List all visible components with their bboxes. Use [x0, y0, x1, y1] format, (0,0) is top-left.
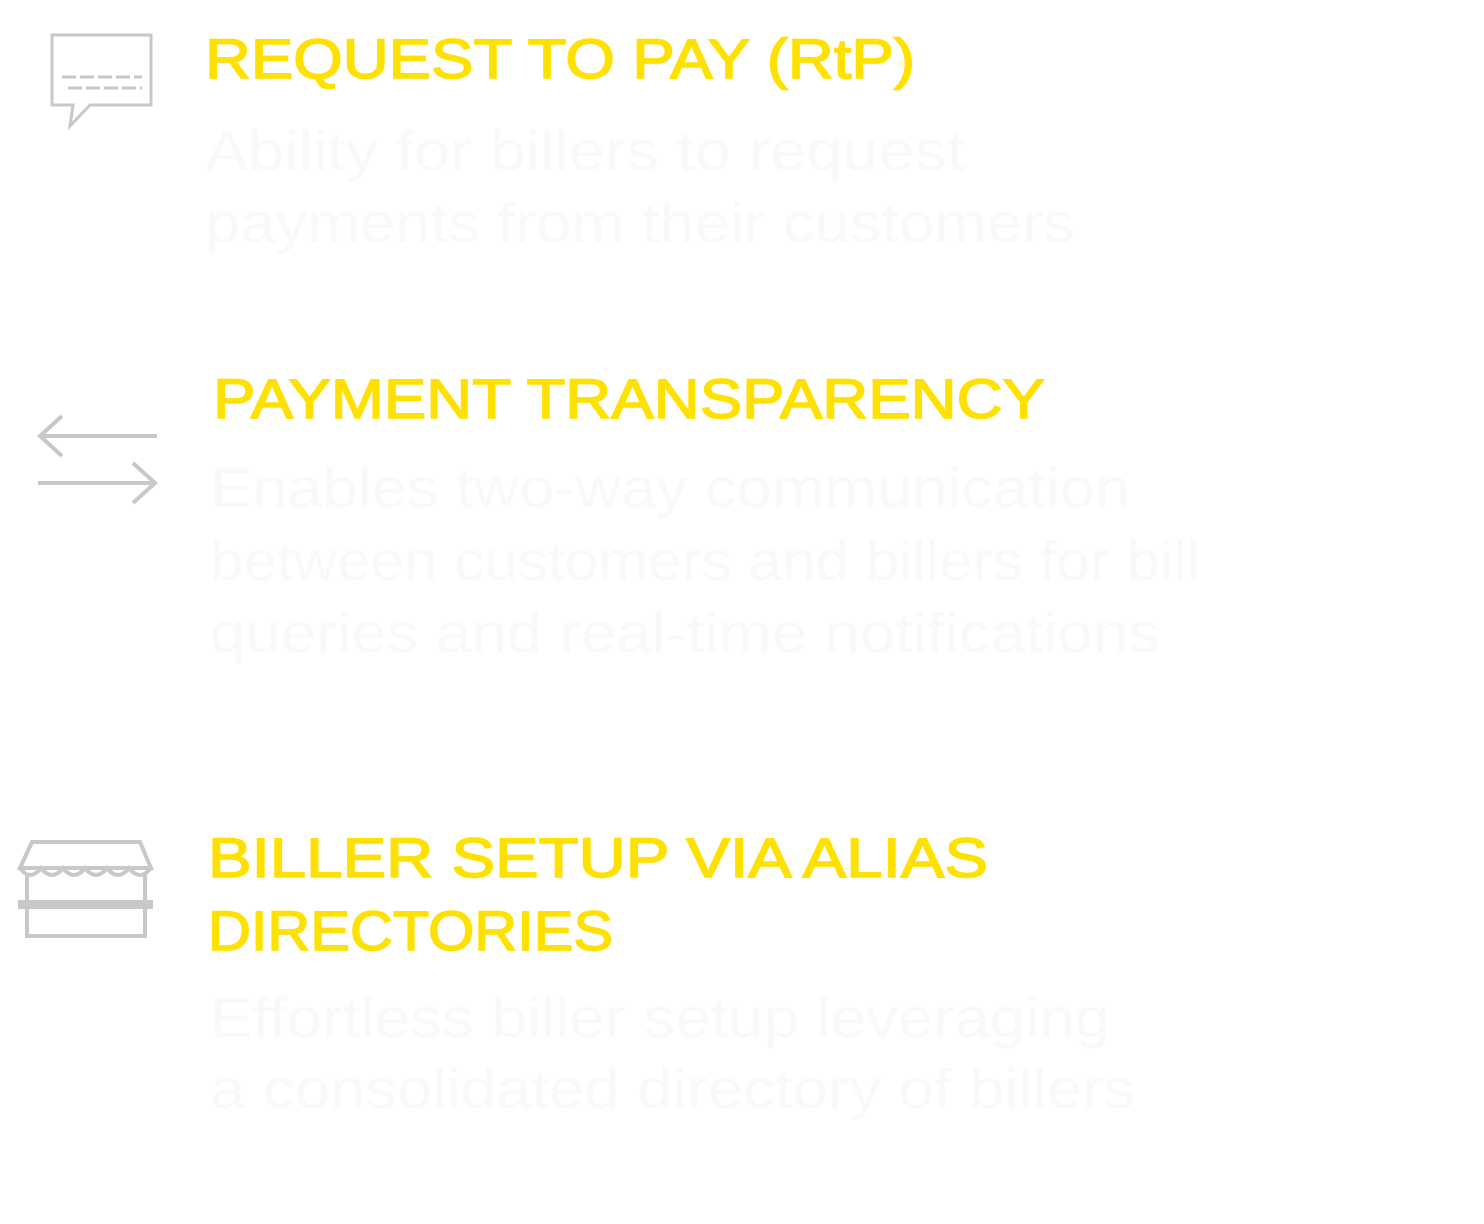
icon: speech bubble [52, 35, 151, 126]
text: transparency description [210, 456, 1200, 664]
title: request to pay: REQUEST TO PAY (RtP) [205, 27, 915, 90]
text: rtp description: payments from their customers [205, 191, 1075, 254]
text: transparency description: queries and real-time notifications [210, 601, 1160, 664]
title: biller setup: DIRECTORIES [208, 899, 613, 962]
icon: two-way arrows [38, 416, 157, 503]
title: biller setup [208, 826, 988, 962]
text: biller setup description: Effortless biller setup leveraging [210, 986, 1110, 1049]
text: rtp description: Ability for billers to request [205, 119, 966, 182]
text: transparency description: between customers and billers for bill [210, 529, 1200, 592]
title: biller setup: BILLER SETUP VIA ALIAS [208, 826, 988, 889]
text: biller setup description: a consolidated directory of billers [210, 1057, 1135, 1120]
text: biller setup description [210, 986, 1135, 1120]
text: transparency description: Enables two-way communication [210, 456, 1130, 519]
title: payment transparency: PAYMENT TRANSPARENCY [213, 367, 1045, 430]
text: rtp description [205, 119, 1075, 254]
icon: store [18, 842, 153, 936]
